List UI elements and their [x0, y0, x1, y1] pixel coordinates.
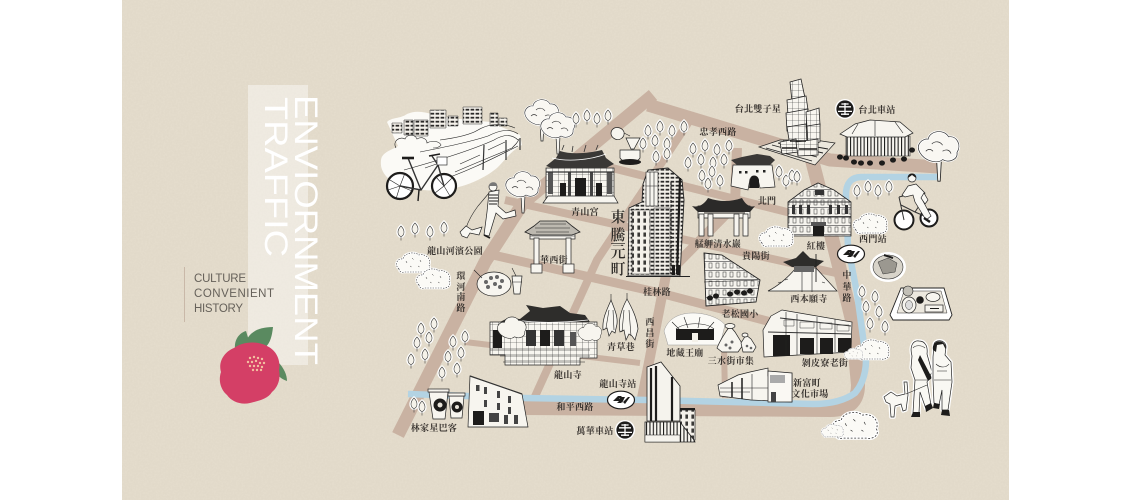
label: Sanshui Street Market: 三水街市集	[708, 355, 754, 366]
landmark: Lin family house	[468, 376, 528, 427]
figure: boy	[933, 341, 952, 416]
label: Wanhua Station: 萬華車站	[576, 425, 614, 436]
label: Laosong Elementary: 老松國小	[721, 308, 759, 319]
title: Dongteng Yuanting	[610, 208, 626, 278]
landmark: Taipei Twin Towers	[759, 79, 835, 165]
icon group: leaf trees	[397, 110, 893, 416]
icon: Wanhua railway logo	[615, 420, 635, 440]
landmark: old arcade building	[704, 253, 760, 306]
label: Xichang Street: 街	[645, 338, 655, 349]
label: Huanhe South Road: 環	[456, 270, 466, 281]
label: Xichang Street: 昌	[645, 328, 655, 338]
icon: Ximen MRT logo	[838, 245, 864, 263]
label: North Gate: 北門	[758, 195, 776, 206]
landmark: Huaxi Street gate	[525, 221, 580, 273]
icon: Taipei Station railway logo	[835, 99, 855, 119]
label: Guiyang Street: 貴陽街	[742, 250, 770, 261]
landmark: Taipei Main Station	[837, 120, 915, 166]
label: Zhonghua Road: 中	[842, 269, 852, 280]
illustration: bush near Ximen	[853, 214, 887, 233]
label: Huanhe South Road: 南	[456, 291, 466, 302]
illustration: herb bundles	[603, 293, 638, 340]
heading: ENVIORNMENT: ENVIORNMENT	[288, 95, 324, 365]
icon: coffee dripper and kettle	[611, 128, 641, 165]
text block: culture convenient history: HISTORY	[194, 303, 243, 315]
river	[408, 177, 937, 404]
panel: translucent title band	[248, 85, 308, 365]
icon: meal tray	[890, 286, 952, 320]
landmark: Qingshan Temple	[543, 145, 618, 203]
illustration: Starbucks cups	[428, 389, 465, 419]
label: Red House: 紅樓	[807, 240, 826, 251]
label: Zhongxiao West Road: 忠孝西路	[699, 126, 737, 137]
label: Taipei Station: 台北車站	[858, 104, 896, 115]
road network	[398, 95, 938, 435]
label: Ximen Station: 西門站	[859, 233, 887, 244]
illustration: couple walking dog	[884, 341, 952, 417]
illustration: cyclist	[894, 174, 938, 230]
illustration: trees by river	[525, 100, 575, 154]
title: Dongteng Yuanting: 騰	[610, 227, 626, 244]
landmark: Monga Qingshui Temple	[692, 198, 755, 236]
text block: culture convenient history: CONVENIENT	[194, 288, 274, 300]
landmark: Dongteng tower	[626, 168, 690, 276]
label: Nishi Honganji: 西本願寺	[790, 293, 828, 304]
label: Heping West Road: 和平西路	[556, 401, 594, 412]
landmark: Nishi Honganji	[768, 251, 837, 292]
landmark: Wanhua tower	[645, 362, 695, 442]
landmark: Longshan Temple	[490, 305, 602, 365]
label: Longshan Temple: 龍山寺	[554, 369, 582, 380]
label: Huanhe South Road	[456, 270, 466, 313]
panel: paper background	[122, 0, 1009, 500]
landmark: Xinfu market	[718, 368, 792, 402]
figure: dog	[884, 382, 927, 417]
label: Taipei Twin Towers: 台北雙子星	[735, 103, 781, 114]
label: Huaxi Street: 華西街	[540, 254, 568, 265]
label: Longshan Riverside Park: 龍山河濱公園	[427, 245, 483, 256]
label: Qingshan Temple: 青山宮	[571, 206, 599, 217]
illustration: bottom bushes	[822, 412, 877, 439]
label: Longshan Temple Station: 龍山寺站	[599, 378, 637, 389]
landmark: North Gate	[731, 154, 775, 190]
label: Xinfu market name: 文化市場	[791, 388, 829, 399]
icon: bicycle	[387, 154, 456, 201]
text block: culture convenient history	[184, 267, 274, 322]
icon: Longshan Temple MRT logo	[608, 391, 634, 409]
figure: girl	[911, 341, 933, 417]
label: Xinfu market name	[791, 377, 829, 399]
label: Bopiliao Old Street: 剝皮寮老街	[802, 357, 848, 368]
icon: big tree right	[918, 132, 959, 181]
illustration: market bags	[717, 324, 756, 352]
label: Xinfu market name: 新富町	[793, 377, 821, 388]
icon: camellia flower	[220, 327, 287, 404]
heading: TRAFFIC: TRAFFIC	[258, 97, 294, 257]
label: Herb Alley: 青草巷	[607, 341, 635, 352]
label: Zhonghua Road: 華	[842, 281, 852, 292]
text block: culture convenient history: CULTURE	[194, 273, 246, 285]
icon: park tree	[506, 172, 540, 213]
illustration: riverside park	[381, 107, 522, 191]
landmark: Bopiliao old street	[763, 310, 852, 357]
title: Dongteng Yuanting: 元	[610, 244, 626, 261]
icon: food plate	[870, 252, 906, 282]
label: Xichang Street	[645, 316, 655, 349]
label: Huanhe South Road: 河	[456, 281, 466, 292]
title: Dongteng Yuanting: 東	[610, 208, 626, 226]
label: Xichang Street: 西	[645, 316, 655, 327]
illustration: bush near Red House	[759, 227, 793, 246]
illustration: shaved ice and drink	[474, 268, 522, 296]
landmark: Dizang Temple	[664, 313, 725, 345]
illustration: bush near Bopiliao	[844, 340, 889, 359]
illustration: bushes left	[396, 253, 450, 288]
label: Zhonghua Road: 路	[842, 292, 852, 303]
label: Dizang Temple: 地藏王廟	[666, 347, 704, 358]
illustration: dog walker	[460, 182, 516, 238]
label: Lin family Starbucks: 林家星巴客	[411, 422, 457, 433]
label: Monga Qingshui Temple: 艋舺清水巖	[695, 238, 741, 249]
label: Zhonghua Road	[842, 269, 852, 303]
landmark: Red House	[788, 183, 851, 236]
label: Huanhe South Road: 路	[456, 302, 466, 313]
label: Guilin Road: 桂林路	[643, 286, 671, 297]
title: Dongteng Yuanting: 町	[610, 261, 626, 278]
